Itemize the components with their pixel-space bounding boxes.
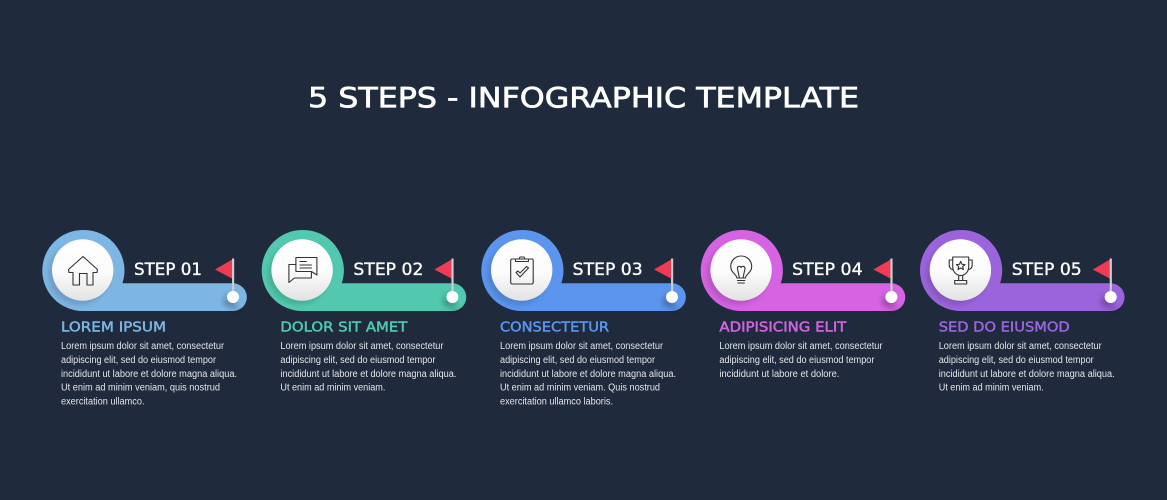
step 03 text: exercitation ullamco laboris. — [500, 396, 613, 408]
step 02 text — [280, 341, 456, 394]
step 05 white disc — [930, 239, 991, 301]
step 05 shadows — [926, 243, 1118, 311]
icon: light bulb — [731, 256, 752, 283]
step 01 text: Lorem ipsum dolor sit amet, consectetur — [61, 341, 225, 352]
panel: step 02 — [262, 230, 466, 394]
step 03 text — [500, 341, 676, 408]
step 03 text: incididunt ut labore et dolore magna aliqua. — [500, 369, 676, 380]
step 01 text: adipiscing elit, sed do eiusmod tempor — [61, 355, 217, 366]
step 04 heading: ADIPISICING ELIT — [719, 320, 846, 336]
step 05 text: adipiscing elit, sed do eiusmod tempor — [939, 355, 1094, 366]
step 03 label: STEP 03 — [573, 260, 643, 279]
step 05 heading: SED DO EIUSMOD — [939, 320, 1070, 336]
icon: chat bubbles — [289, 258, 317, 282]
icon: trophy — [949, 257, 972, 284]
step 03 text: Lorem ipsum dolor sit amet, consectetur — [500, 341, 664, 352]
panel: step 04 — [701, 230, 905, 380]
step 04 text: Lorem ipsum dolor sit amet, consectetur — [719, 341, 883, 352]
icon: flag — [434, 258, 458, 303]
icon: flag — [873, 258, 897, 303]
step 03 text: adipiscing elit, sed do eiusmod tempor — [500, 355, 656, 366]
step 05 badge shape — [920, 230, 1125, 311]
step 01 heading: LOREM IPSUM — [61, 320, 166, 336]
step 02 badge shape — [262, 230, 466, 311]
step 05 text: Ut enim ad minim veniam. — [939, 382, 1044, 394]
step 02 text: adipiscing elit, sed do eiusmod tempor — [280, 355, 436, 366]
icon: flag — [654, 258, 678, 303]
step 01 text: incididunt ut labore et dolore magna aliqua. — [61, 369, 237, 380]
step 02 text: incididunt ut labore et dolore magna aliqua. — [280, 369, 456, 380]
step 02 heading: DOLOR SIT AMET — [280, 320, 407, 336]
step 01 text — [61, 341, 237, 408]
step 04 badge shape — [701, 230, 905, 311]
step 01 label: STEP 01 — [134, 260, 202, 279]
step 04 text — [719, 341, 883, 380]
step 03 text: Ut enim ad minim veniam. Quis nostrud — [500, 382, 660, 394]
icon: house — [68, 256, 98, 285]
step 05 text: incididunt ut labore et dolore magna aliqua. — [939, 369, 1115, 380]
step 05 label: STEP 05 — [1012, 260, 1082, 279]
step 02 white disc — [271, 239, 333, 301]
icon: flag — [215, 258, 239, 303]
panel: step 05 — [920, 230, 1125, 394]
step 03 badge shape — [481, 230, 686, 311]
step 01 white disc — [52, 239, 113, 301]
panel: step 01 — [42, 230, 247, 408]
step 02 text: Lorem ipsum dolor sit amet, consectetur — [280, 341, 444, 352]
step 03 shadows — [488, 243, 679, 311]
step 01 text: Ut enim ad minim veniam, quis nostrud — [61, 382, 220, 394]
step 03 heading: CONSECTETUR — [500, 320, 609, 336]
step 03 white disc — [491, 239, 552, 301]
step 04 text: adipiscing elit, sed do eiusmod tempor — [719, 355, 875, 366]
step 04 label: STEP 04 — [792, 260, 863, 279]
step 01 badge shape — [42, 230, 247, 311]
title: 5 STEPS - INFOGRAPHIC TEMPLATE — [308, 81, 859, 114]
step 05 text — [939, 341, 1115, 394]
step 04 white disc — [710, 239, 772, 301]
icon: flag — [1093, 258, 1117, 303]
step 02 shadows — [268, 243, 459, 311]
step 02 text: Ut enim ad minim veniam. — [280, 382, 385, 394]
step 04 text: incididunt ut labore et dolore. — [719, 369, 839, 380]
step 02 label: STEP 02 — [353, 260, 423, 279]
icon: clipboard — [511, 257, 533, 284]
step 01 text: exercitation ullamco. — [61, 396, 144, 408]
panel: step 03 — [481, 230, 686, 408]
step 04 shadows — [707, 243, 898, 311]
step 05 text: Lorem ipsum dolor sit amet, consectetur — [939, 341, 1102, 352]
step 01 shadows — [48, 243, 240, 311]
